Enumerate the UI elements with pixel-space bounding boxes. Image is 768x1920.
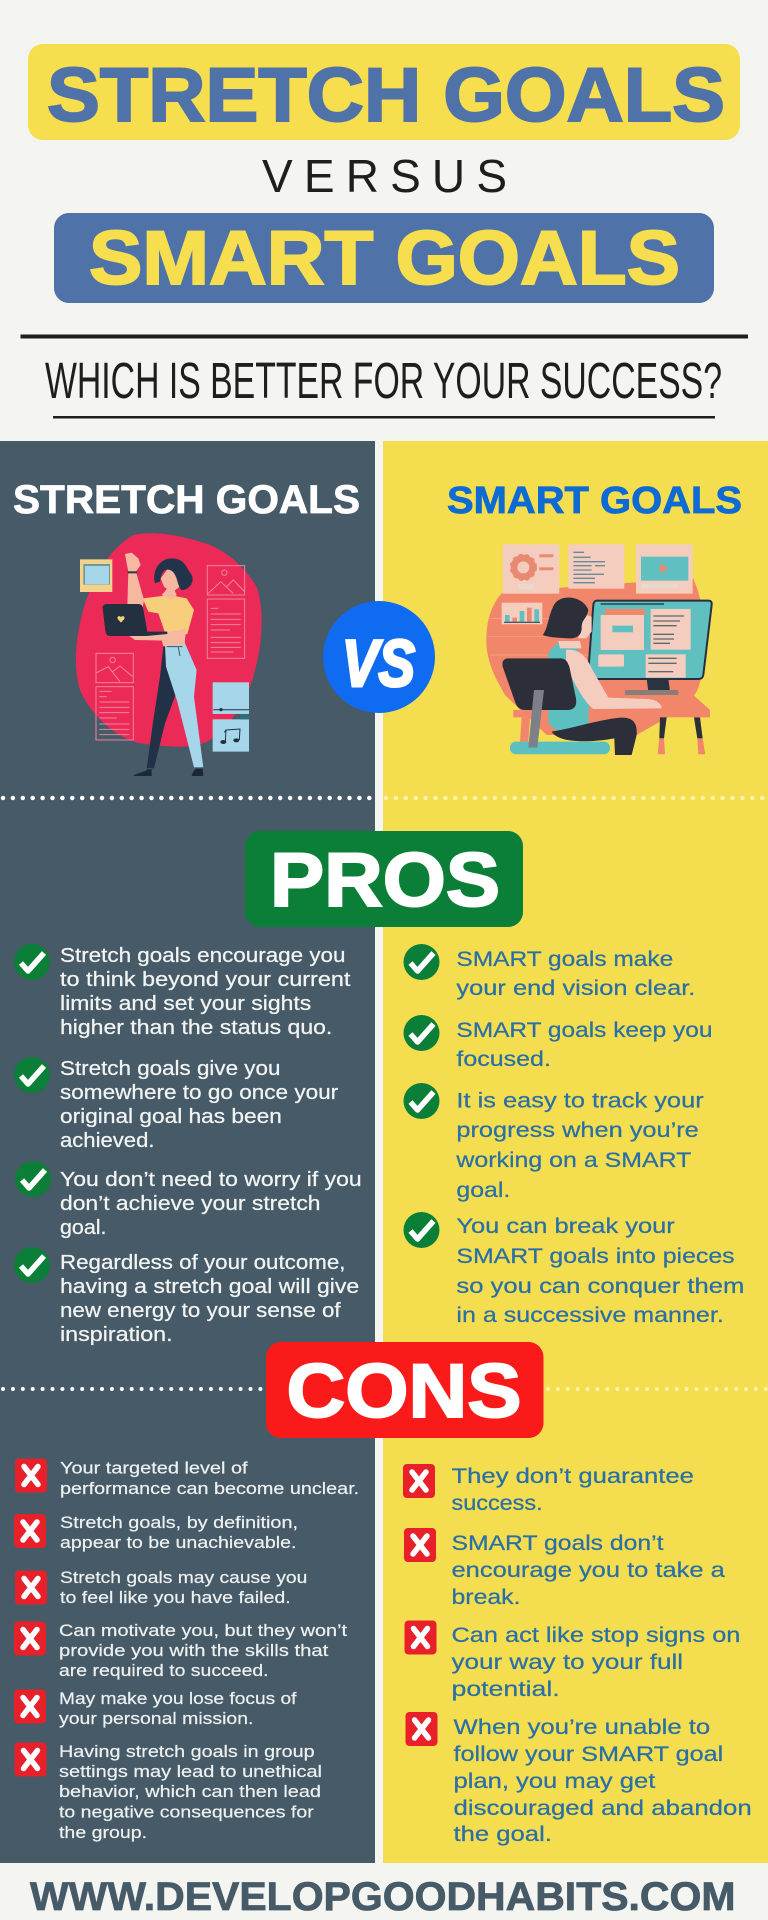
pro item: clear vision: SMART goals make <box>456 947 673 971</box>
icon: VS badge: VS <box>342 626 415 700</box>
pro item: no worry: goal. <box>60 1217 106 1239</box>
con item: feel failed: Stretch goals may cause you <box>60 1568 307 1587</box>
con item: abandon the goal: follow your SMART goal <box>454 1742 723 1766</box>
con item: no break: encourage you to take a <box>452 1558 725 1582</box>
con item: unclear performance: Your targeted level of <box>60 1459 248 1478</box>
heading: versus: VERSUS <box>262 150 507 202</box>
pro item: break into pieces: You can break your <box>456 1214 675 1238</box>
con item: unachievable: Stretch goals, by definition, <box>60 1513 298 1532</box>
heading: smart goals column: SMART GOALS <box>447 480 742 522</box>
pro item: somewhere to go: Stretch goals give you <box>60 1058 280 1080</box>
con item: abandon the goal: the goal. <box>454 1822 552 1846</box>
con item: abandon the goal: discouraged and abandon <box>454 1796 752 1820</box>
pro item: break into pieces: SMART goals into pieces <box>456 1244 735 1268</box>
con item: abandon the goal: plan, you may get <box>454 1769 655 1793</box>
pro item: break into pieces <box>404 1212 744 1327</box>
con item: unethical behavior: to negative consequences for <box>59 1802 314 1822</box>
footer: website url: WWW.DEVELOPGOODHABITS.COM <box>30 1875 736 1919</box>
con item: no break: SMART goals don’t <box>452 1531 664 1555</box>
con item: abandon the goal <box>406 1712 752 1846</box>
heading: cons badge: CONS <box>286 1349 522 1434</box>
pro item: break into pieces: so you can conquer them <box>456 1274 744 1298</box>
con item: missing skills: Can motivate you, but they won’t <box>59 1621 347 1640</box>
pro item: think beyond limits: higher than the status quo. <box>60 1017 332 1039</box>
pro item: somewhere to go <box>14 1057 339 1152</box>
pro item: new energy: new energy to your sense of <box>60 1300 341 1322</box>
con item: missing skills <box>14 1621 347 1680</box>
illustration: woman holding laptop <box>76 533 262 776</box>
pro item: track progress <box>404 1083 704 1202</box>
con item: no guarantee: success. <box>452 1491 543 1515</box>
pro item: track progress: progress when you’re <box>456 1118 699 1142</box>
con item: unethical behavior <box>14 1742 322 1842</box>
con item: unethical behavior: behavior, which can then lead <box>59 1782 321 1801</box>
heading: stretch goals column: STRETCH GOALS <box>13 478 360 522</box>
pro item: focused: SMART goals keep you <box>456 1018 712 1042</box>
pro item: think beyond limits: limits and set your sights <box>60 993 311 1015</box>
panel: stretch goals cons <box>14 1458 359 1842</box>
con item: unachievable <box>14 1513 298 1552</box>
pro item: clear vision <box>404 944 695 1000</box>
pro item: think beyond limits: Stretch goals encourage you <box>60 945 346 967</box>
con item: stop signs <box>404 1620 740 1701</box>
pro item: track progress: goal. <box>456 1178 510 1202</box>
con item: unethical behavior: settings may lead to unethical <box>59 1762 322 1781</box>
heading: pros badge: PROS <box>270 838 500 923</box>
pro item: new energy <box>14 1247 359 1346</box>
pro item: somewhere to go: achieved. <box>60 1130 154 1152</box>
con item: no guarantee: They don’t guarantee <box>452 1464 694 1488</box>
con item: lose focus: May make you lose focus of <box>59 1689 297 1708</box>
pro item: new energy: having a stretch goal will give <box>60 1276 359 1298</box>
pro item: new energy: inspiration. <box>60 1324 173 1346</box>
con item: feel failed: to feel like you have failed. <box>60 1588 291 1607</box>
con item: unclear performance <box>15 1458 359 1498</box>
pro item: focused: focused. <box>456 1047 551 1071</box>
pro item: break into pieces: in a successive manner. <box>456 1303 724 1327</box>
illustration: person working at computer <box>486 544 712 755</box>
con item: lose focus: your personal mission. <box>59 1709 253 1728</box>
pro item: think beyond limits <box>14 944 351 1039</box>
con item: no break <box>404 1528 725 1609</box>
con item: unachievable: appear to be unachievable. <box>60 1533 296 1552</box>
con item: missing skills: provide you with the skills that <box>59 1641 329 1660</box>
icon: VS badge <box>323 601 435 713</box>
con item: lose focus <box>14 1689 297 1728</box>
title: stretch goals banner: STRETCH GOALS <box>47 53 725 138</box>
pro item: no worry <box>15 1161 362 1239</box>
heading: pros badge <box>245 831 523 927</box>
pro item: somewhere to go: original goal has been <box>60 1106 282 1128</box>
title: smart goals banner: SMART GOALS <box>89 216 680 301</box>
con item: missing skills: are required to succeed. <box>59 1661 269 1680</box>
con item: unethical behavior: Having stretch goals in group <box>59 1742 315 1761</box>
panel: smart goals column background <box>383 441 768 1863</box>
con item: stop signs: Can act like stop signs on <box>452 1623 740 1647</box>
pro item: somewhere to go: somewhere to go once your <box>60 1082 339 1104</box>
con item: no guarantee <box>403 1464 694 1515</box>
con item: stop signs: your way to your full <box>452 1650 683 1674</box>
con item: unclear performance: performance can become unclear. <box>60 1479 359 1498</box>
con item: feel failed <box>15 1568 307 1607</box>
panel: smart goals pros <box>404 944 744 1327</box>
panel: smart goals cons <box>403 1464 752 1846</box>
pro item: no worry: You don’t need to worry if you <box>60 1169 362 1191</box>
con item: no break: break. <box>452 1585 520 1609</box>
panel: stretch goals column background <box>0 441 375 1863</box>
panel: stretch goals pros <box>14 944 362 1346</box>
pro item: clear vision: your end vision clear. <box>456 976 695 1000</box>
con item: abandon the goal: When you’re unable to <box>454 1715 710 1739</box>
pro item: new energy: Regardless of your outcome, <box>60 1252 346 1274</box>
pro item: focused <box>404 1015 712 1071</box>
pro item: track progress: working on a SMART <box>455 1148 691 1172</box>
con item: unethical behavior: the group. <box>59 1823 147 1842</box>
con item: stop signs: potential. <box>452 1677 560 1701</box>
pro item: no worry: don’t achieve your stretch <box>60 1193 320 1215</box>
pro item: track progress: It is easy to track your <box>456 1088 704 1112</box>
pro item: think beyond limits: to think beyond your current <box>60 969 351 991</box>
